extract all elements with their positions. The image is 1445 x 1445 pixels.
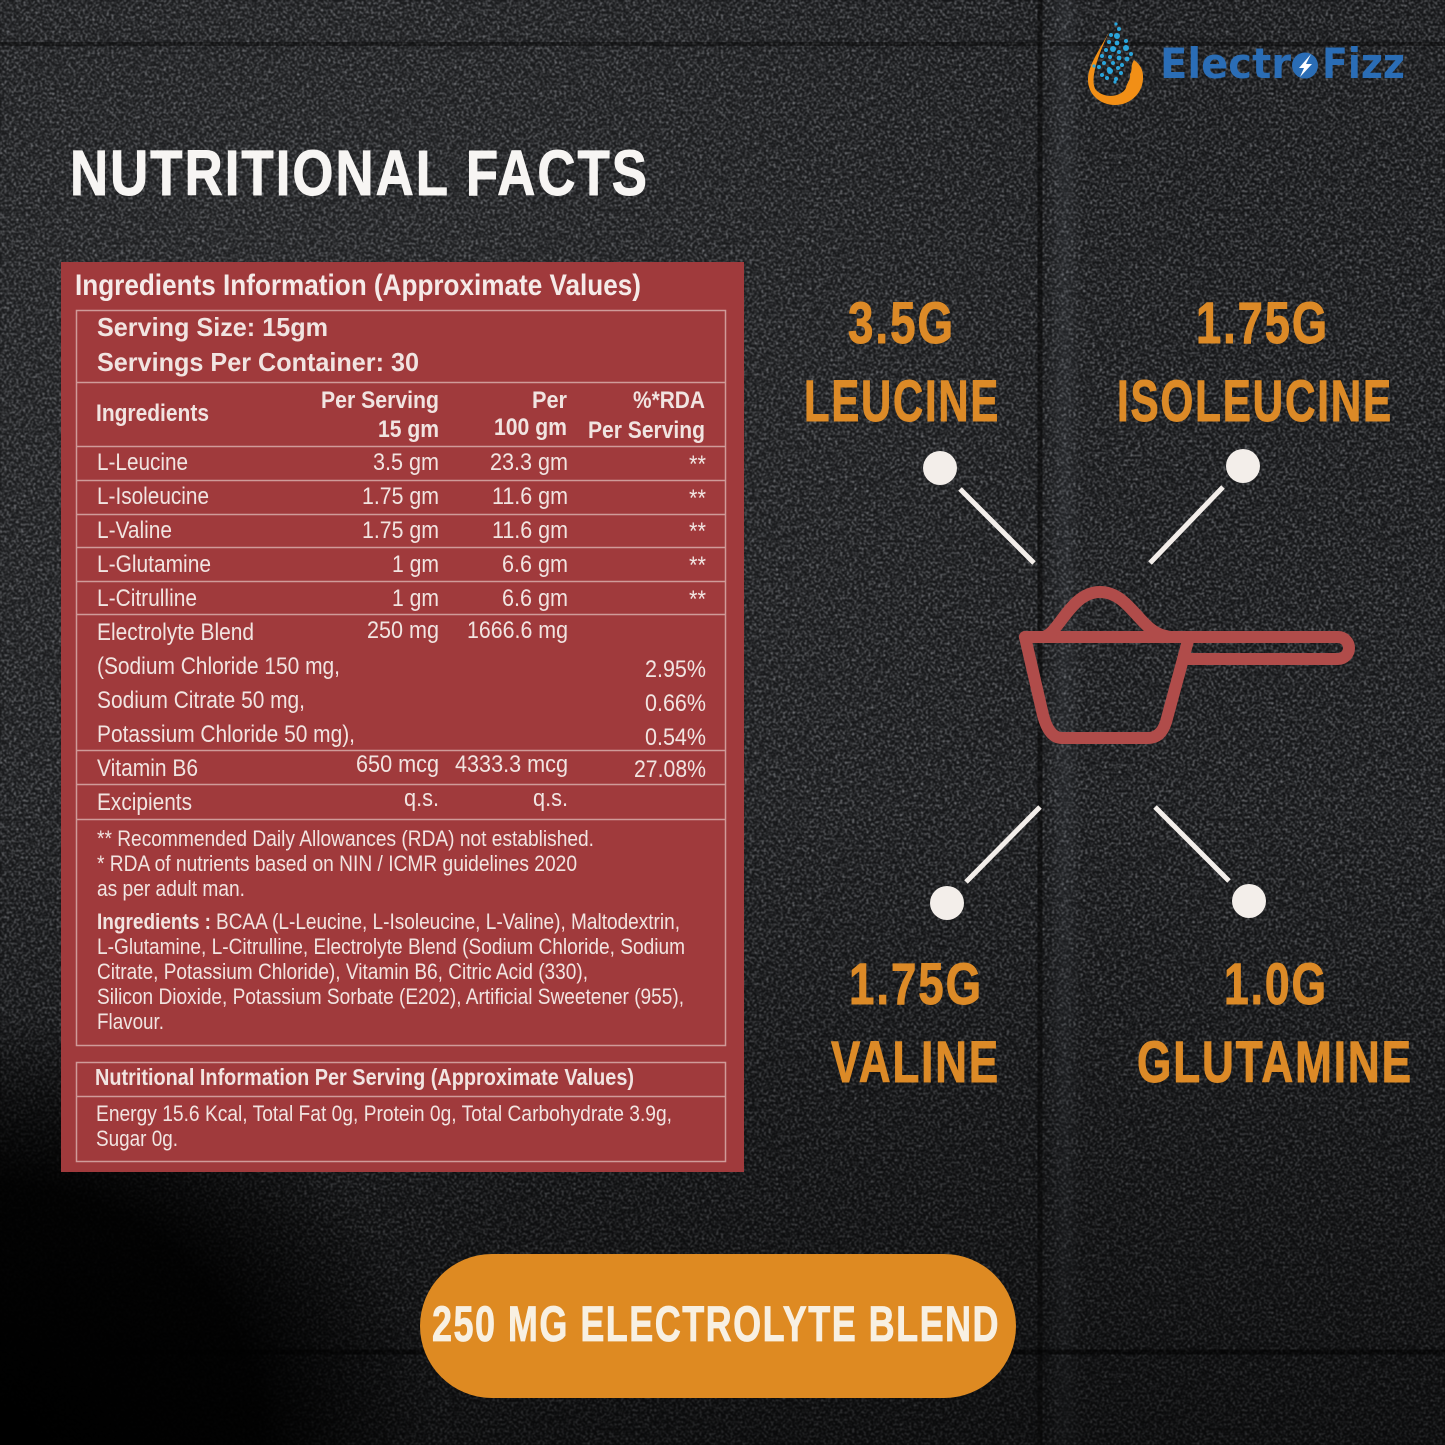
table rows: amino acids: ** — [689, 518, 706, 545]
table header: Per Serving — [321, 387, 439, 414]
table rows: amino acids: 11.6 gm — [492, 483, 568, 510]
table rows: electrolyte blend: 2.95% — [645, 656, 706, 683]
panel: ingredients information — [61, 262, 744, 1172]
table rows: electrolyte blend: 0.54% — [645, 724, 706, 751]
label: isoleucine: 1.75G — [1196, 291, 1329, 356]
logo: ElectroFizz — [1088, 22, 1405, 105]
table header: Per — [532, 387, 567, 414]
icon: water drop with bubbles — [1088, 22, 1143, 105]
connector: valine — [930, 807, 1040, 920]
table rows: vitamin and excipients: 4333.3 mcg — [455, 751, 568, 778]
table rows: electrolyte blend: 1666.6 mg — [467, 617, 568, 644]
table rows: vitamin and excipients: 27.08% — [634, 756, 706, 783]
table rows: electrolyte blend — [97, 617, 706, 751]
label: leucine: LEUCINE — [804, 369, 1000, 434]
table header: %*RDA — [633, 387, 705, 414]
icon: measuring scoop — [1025, 592, 1349, 738]
serving info — [97, 312, 419, 377]
RDA notes — [97, 826, 594, 901]
nutritional information per serving: Energy 15.6 Kcal, Total Fat 0g, Protein 0g, Total Carbohydrate 3.9g, — [96, 1101, 672, 1126]
table rows: vitamin and excipients: Vitamin B6 — [97, 755, 198, 782]
table rows: amino acids: 1 gm — [392, 585, 439, 612]
table rows: vitamin and excipients: q.s. — [533, 785, 568, 812]
table rows: vitamin and excipients: 650 mcg — [356, 751, 439, 778]
label: valine: 1.75G — [849, 952, 983, 1017]
table rows: amino acids: L-Leucine — [97, 449, 188, 476]
table header: 100 gm — [494, 414, 567, 441]
wordmark: Electr — [1160, 39, 1291, 88]
table rows: amino acids: L-Glutamine — [97, 551, 211, 578]
title: NUTRITIONAL FACTS — [70, 137, 649, 209]
table rows: electrolyte blend: 250 mg — [367, 617, 439, 644]
label: isoleucine — [1117, 291, 1393, 434]
table rows: amino acids: L-Citrulline — [97, 585, 197, 612]
wordmark — [1160, 39, 1405, 88]
table rows: electrolyte blend: (Sodium Chloride 150 mg, — [97, 653, 340, 680]
nutritional information per serving: Sugar 0g. — [96, 1126, 178, 1151]
table rows: vitamin and excipients: Excipients — [97, 789, 192, 816]
wordmark: o — [1293, 43, 1317, 87]
table rows: amino acids: 1.75 gm — [362, 483, 439, 510]
nutritional information per serving — [95, 1064, 672, 1151]
table header: Per Serving — [588, 417, 705, 444]
table rows: amino acids: 6.6 gm — [502, 551, 568, 578]
table rows: amino acids: 1.75 gm — [362, 517, 439, 544]
table rows: amino acids: ** — [689, 552, 706, 579]
connector: isoleucine — [1150, 449, 1260, 563]
table rows: amino acids: 1 gm — [392, 551, 439, 578]
table rows: electrolyte blend: Potassium Chloride 50 mg), — [97, 721, 355, 748]
table rows: electrolyte blend: 0.66% — [645, 690, 706, 717]
label: glutamine: 1.0G — [1224, 952, 1328, 1017]
table rows: amino acids: L-Valine — [97, 517, 172, 544]
wordmark: Fizz — [1322, 39, 1405, 88]
table rows: amino acids: ** — [689, 586, 706, 613]
panel heading: Ingredients Information (Approximate Values) — [75, 269, 641, 302]
table rows: electrolyte blend: Electrolyte Blend — [97, 619, 254, 646]
table rows: amino acids: 11.6 gm — [492, 517, 568, 544]
table rows: amino acids: 6.6 gm — [502, 585, 568, 612]
RDA notes: * RDA of nutrients based on NIN / ICMR guidelines 2020 — [97, 851, 577, 876]
ingredients list — [97, 909, 685, 1034]
serving info: Serving Size: 15gm — [97, 312, 328, 342]
nutritional information per serving: Nutritional Information Per Serving (Approximate Values) — [95, 1064, 634, 1090]
ingredients list: Silicon Dioxide, Potassium Sorbate (E202), Artificial Sweetener (955), — [97, 984, 684, 1009]
ingredients list: Ingredients : — [97, 909, 211, 934]
ingredients list: L-Glutamine, L-Citrulline, Electrolyte Blend (Sodium Chloride, Sodium — [97, 934, 685, 959]
ingredients list: Flavour. — [97, 1009, 164, 1034]
label: valine — [831, 952, 1000, 1095]
RDA notes: ** Recommended Daily Allowances (RDA) not established. — [97, 826, 594, 851]
callout: electrolyte blend pill — [420, 1254, 1016, 1398]
table header — [96, 387, 705, 444]
table header: 15 gm — [378, 416, 439, 443]
table rows: amino acids: L-Isoleucine — [97, 483, 209, 510]
table header: Ingredients — [96, 400, 209, 427]
table rows: amino acids: ** — [689, 485, 706, 512]
table rows: amino acids — [97, 449, 706, 613]
table rows: vitamin and excipients: q.s. — [404, 785, 439, 812]
table rows: electrolyte blend: Sodium Citrate 50 mg, — [97, 687, 305, 714]
label: valine: VALINE — [831, 1030, 1000, 1095]
connector: leucine — [923, 451, 1034, 563]
serving info: Servings Per Container: 30 — [97, 347, 419, 377]
connector: glutamine — [1155, 807, 1266, 918]
table rows: amino acids: 23.3 gm — [490, 449, 568, 476]
table rows: amino acids: 3.5 gm — [373, 449, 439, 476]
ingredients list: Citrate, Potassium Chloride), Vitamin B6, Citric Acid (330), — [97, 959, 588, 984]
ingredients list: BCAA (L-Leucine, L-Isoleucine, L-Valine), Maltodextrin, — [216, 909, 680, 934]
table rows: amino acids: ** — [689, 451, 706, 478]
RDA notes: as per adult man. — [97, 876, 245, 901]
label: glutamine — [1137, 952, 1413, 1095]
table rows: vitamin and excipients — [97, 751, 706, 816]
callout: electrolyte blend pill: 250 MG ELECTROLYTE BLEND — [432, 1296, 1000, 1352]
label: leucine — [804, 291, 1000, 434]
label: leucine: 3.5G — [848, 291, 955, 356]
